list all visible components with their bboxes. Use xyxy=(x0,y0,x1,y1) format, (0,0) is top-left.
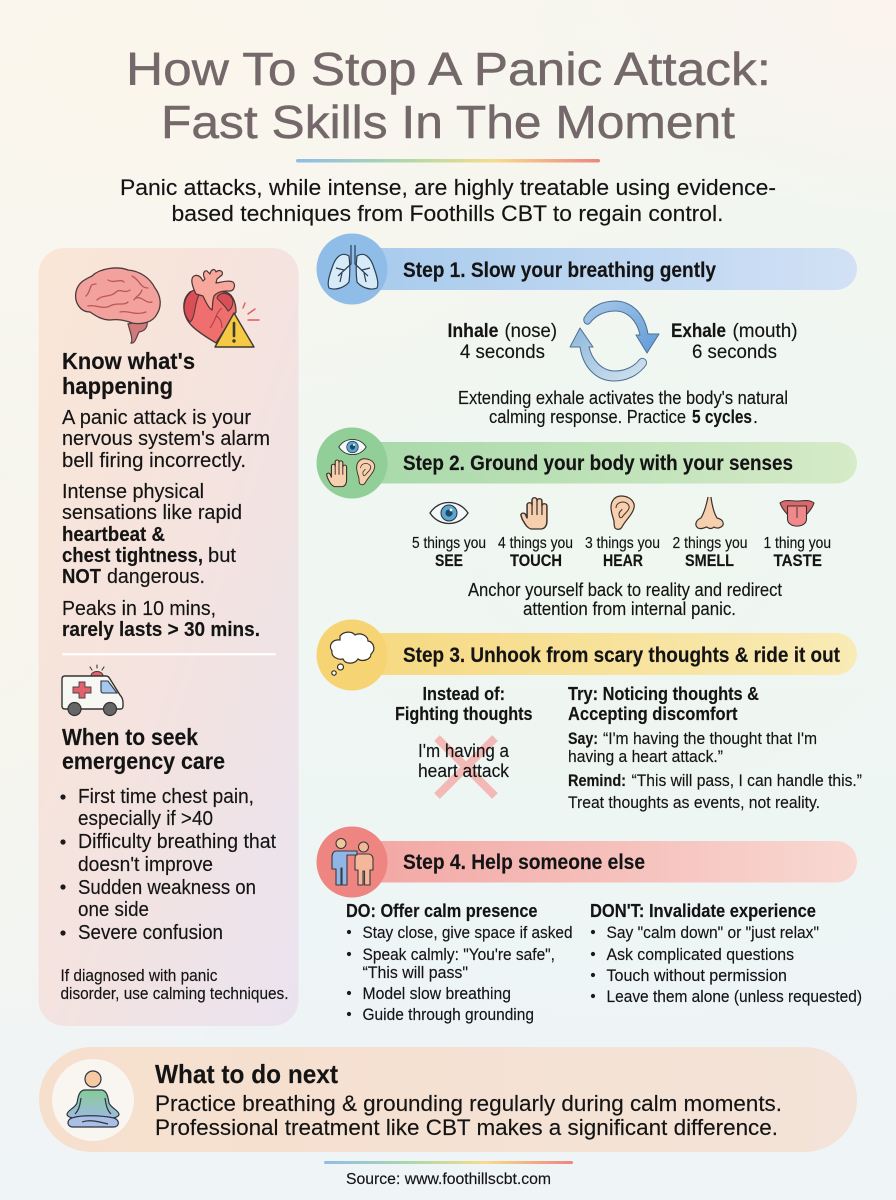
column: try: Treat thoughts as events, not reality. xyxy=(568,793,820,812)
list: emergency signs: especially if >40 xyxy=(78,808,213,830)
source: Source: www.foothillscbt.com xyxy=(346,1171,551,1188)
column: try: Say: xyxy=(568,729,598,748)
text block: physical sensations: sensations like rapid xyxy=(62,502,242,524)
column: instead of: Fighting thoughts xyxy=(395,703,532,724)
list: emergency signs: one side xyxy=(78,899,149,921)
header: step 1: Step 1. Slow your breathing gently xyxy=(403,259,716,282)
text: next steps xyxy=(155,1091,782,1140)
sense: touch: TOUCH xyxy=(510,551,562,570)
header: step 3 xyxy=(316,620,857,690)
text: exhale explanation: Extending exhale activates the body's natural xyxy=(458,388,788,408)
panel: know what's happening and emergency care xyxy=(38,248,298,1026)
text block: alarm bell: A panic attack is your xyxy=(62,407,251,429)
text block: physical sensations xyxy=(62,481,242,588)
heading: know what's happening: Know what's xyxy=(62,348,195,374)
column: do: Model slow breathing xyxy=(362,984,511,1003)
heading: know what's happening: happening xyxy=(62,373,173,399)
note: panic disorder: disorder, use calming techniques. xyxy=(60,985,288,1003)
text: anchor: attention from internal panic. xyxy=(523,599,736,619)
title: Fast Skills In The Moment xyxy=(161,96,735,148)
sense: see: SEE xyxy=(435,551,463,570)
heading: when to seek emergency care xyxy=(62,724,225,774)
icon: ambulance xyxy=(62,665,123,716)
column: instead of: heart attack xyxy=(418,760,510,781)
column: try: “This will pass, I can handle this.” xyxy=(632,771,862,790)
column: do: Stay close, give space if asked xyxy=(362,923,572,942)
header: step 1 xyxy=(316,234,857,304)
icon: red cross xyxy=(437,738,495,796)
icon: two people xyxy=(332,838,373,885)
sense: taste: 1 thing you xyxy=(764,535,831,552)
note: panic disorder: If diagnosed with panic xyxy=(60,967,218,985)
subtitle: Panic attacks, while intense, are highly treatable using evidence- xyxy=(120,175,776,200)
sense: see: 5 things you xyxy=(412,535,486,552)
sense: taste xyxy=(764,500,831,570)
heading: know what's happening xyxy=(62,348,195,399)
list: emergency signs: Severe confusion xyxy=(78,922,223,944)
step 2 xyxy=(316,428,857,619)
sense: taste: TASTE xyxy=(774,551,822,570)
list: emergency signs: First time chest pain, xyxy=(78,786,254,808)
heading: when to seek emergency care: emergency care xyxy=(62,748,225,774)
title: How To Stop A Panic Attack: xyxy=(126,43,771,95)
column: do: DO: Offer calm presence xyxy=(346,900,538,921)
text block: alarm bell xyxy=(62,407,270,472)
label: inhale: 4 seconds xyxy=(460,341,545,363)
label: exhale: (mouth) xyxy=(732,320,798,342)
label: exhale: Exhale xyxy=(671,320,726,342)
column: try: having a heart attack.” xyxy=(568,747,723,766)
column: instead of: Instead of: xyxy=(422,683,505,704)
header: step 3: Step 3. Unhook from scary thoughts & ride it out xyxy=(403,644,840,667)
text: anchor: Anchor yourself back to reality and redirect xyxy=(468,580,782,600)
text: next steps: Professional treatment like CBT makes a significant difference. xyxy=(155,1115,778,1140)
text block: duration: rarely lasts > 30 mins. xyxy=(62,619,260,641)
heading: when to seek emergency care: When to seek xyxy=(62,724,198,750)
column: try: “I'm having the thought that I'm xyxy=(603,729,817,748)
text: exhale explanation: calming response. Practice xyxy=(489,407,686,427)
note: panic disorder xyxy=(60,967,288,1003)
sense: see xyxy=(412,502,486,570)
step 3 xyxy=(316,620,862,812)
sense: hear: HEAR xyxy=(603,551,643,570)
column: do: Speak calmly: "You're safe", xyxy=(362,945,555,964)
list: emergency signs xyxy=(60,786,276,944)
text: exhale explanation: . xyxy=(753,407,758,427)
text: exhale explanation: 5 cycles xyxy=(692,407,752,427)
text block: physical sensations: NOT xyxy=(62,566,101,588)
title xyxy=(126,43,771,148)
sense: smell xyxy=(672,497,748,570)
header: step 4: Step 4. Help someone else xyxy=(403,851,645,874)
column: do: Guide through grounding xyxy=(362,1005,534,1024)
step 1 xyxy=(316,234,857,427)
list: emergency signs: doesn't improve xyxy=(78,854,213,876)
sense: smell: SMELL xyxy=(685,551,734,570)
column: don't: Leave them alone (unless requested) xyxy=(606,987,862,1006)
icon: eye hand ear xyxy=(327,439,375,487)
step 4 xyxy=(316,826,862,1024)
text block: physical sensations: heartbeat & xyxy=(62,524,165,546)
sense: touch xyxy=(498,498,573,570)
icon: heart with warning triangle xyxy=(184,270,259,347)
column: don't: Ask complicated questions xyxy=(606,945,794,964)
column: instead of xyxy=(395,683,532,796)
column: try xyxy=(568,683,862,812)
column: do xyxy=(346,900,572,1024)
icon: thought cloud xyxy=(330,632,374,675)
column: don't xyxy=(590,900,862,1006)
icon: brain xyxy=(76,268,160,343)
text block: alarm bell: bell firing incorrectly. xyxy=(62,450,246,472)
subtitle: based techniques from Foothills CBT to regain control. xyxy=(172,201,724,226)
panel: what to do next xyxy=(39,1047,857,1152)
list: emergency signs: Difficulty breathing that xyxy=(78,831,276,853)
column: don't: DON'T: Invalidate experience xyxy=(590,900,816,921)
header: step 4 xyxy=(316,826,857,898)
text block: physical sensations: chest tightness, xyxy=(62,545,203,567)
text: anchor xyxy=(468,580,782,619)
sense: hear xyxy=(585,496,660,570)
label: exhale: 6 seconds xyxy=(692,341,777,363)
header: step 2: Step 2. Ground your body with your senses xyxy=(403,452,793,475)
column: do: “This will pass" xyxy=(362,963,468,982)
column: try: Accepting discomfort xyxy=(568,703,738,724)
label: inhale: (nose) xyxy=(504,320,557,342)
text block: physical sensations: but xyxy=(208,545,236,567)
column: don't: Touch without permission xyxy=(606,966,787,985)
header: step 2 xyxy=(316,428,857,498)
subtitle xyxy=(120,175,776,226)
icon: meditating person xyxy=(67,1071,119,1127)
text block: duration: Peaks in 10 mins, xyxy=(62,598,216,620)
text: exhale explanation xyxy=(458,388,788,427)
list: emergency signs: Sudden weakness on xyxy=(78,877,256,899)
sense: hear: 3 things you xyxy=(585,535,660,552)
text block: duration xyxy=(62,598,260,641)
label: exhale xyxy=(671,320,798,363)
icon: breathing cycle arrows xyxy=(570,301,659,381)
text block: physical sensations: dangerous. xyxy=(107,566,205,588)
text block: physical sensations: Intense physical xyxy=(62,481,204,503)
icon: lungs xyxy=(328,245,378,289)
column: don't: Say "calm down" or "just relax" xyxy=(606,923,819,942)
text: next steps: Practice breathing & grounding regularly during calm moments. xyxy=(155,1091,782,1116)
text block: alarm bell: nervous system's alarm xyxy=(62,428,270,450)
label: inhale xyxy=(448,320,557,363)
column: instead of: I'm having a xyxy=(418,740,510,761)
column: try: Remind: xyxy=(568,771,626,790)
sense: touch: 4 things you xyxy=(498,535,573,552)
label: inhale: Inhale xyxy=(448,320,499,342)
sense: smell: 2 things you xyxy=(672,535,748,552)
column: try: Try: Noticing thoughts & xyxy=(568,683,759,704)
heading: what to do next: What to do next xyxy=(155,1059,338,1089)
